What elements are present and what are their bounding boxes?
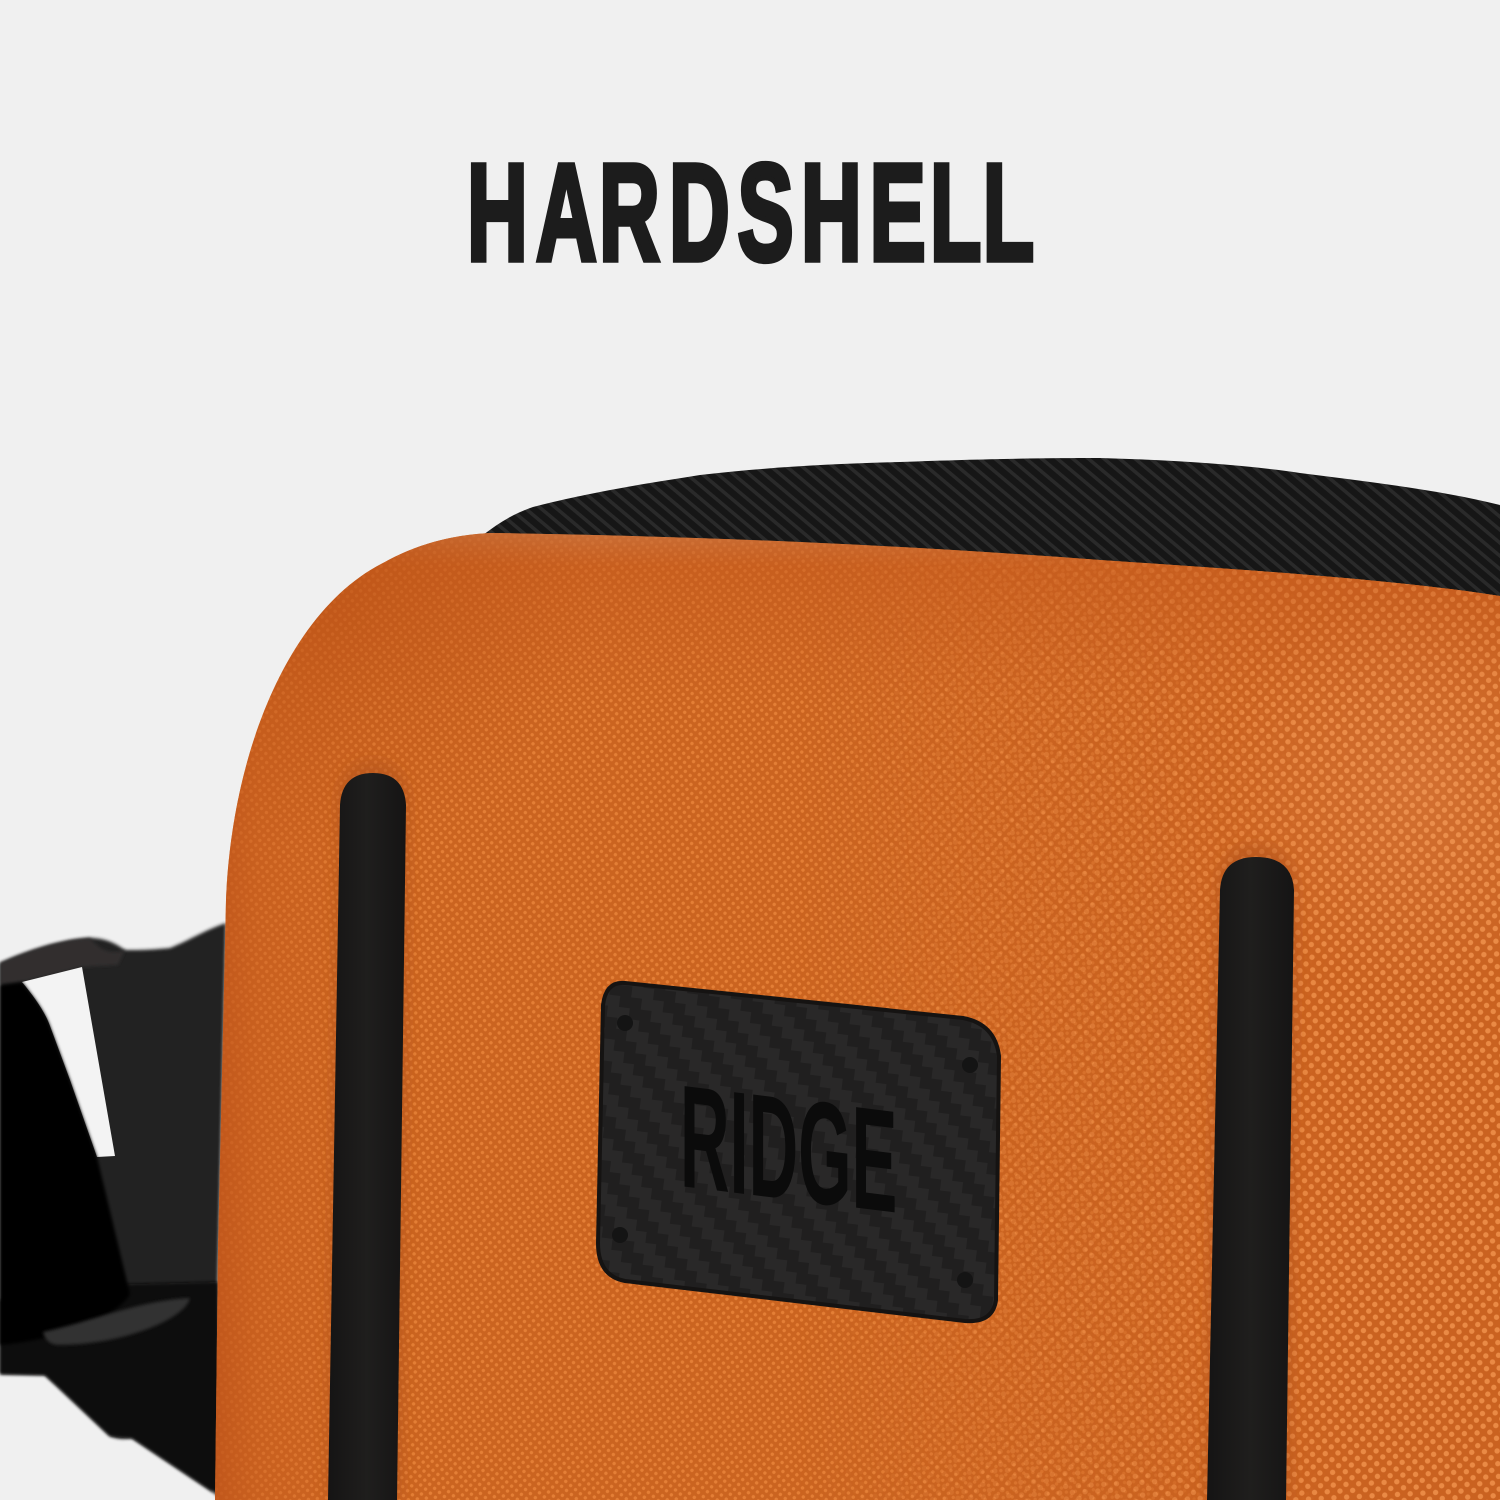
orange hardshell body bbox=[215, 533, 1500, 1500]
carbon fibre RIDGE badge bbox=[598, 983, 999, 1321]
black webbing strap bbox=[0, 982, 130, 1345]
badge logo text: RIDGE bbox=[680, 1056, 897, 1245]
white cutout in buckle bbox=[22, 967, 115, 1157]
badge screw top right bbox=[962, 1057, 978, 1073]
right black rail bbox=[1204, 844, 1298, 1500]
left strap and buckle bbox=[0, 923, 226, 1500]
title: HARDSHELL bbox=[467, 137, 1034, 290]
metal ring bbox=[43, 1298, 190, 1345]
badge screw bottom right bbox=[957, 1272, 973, 1288]
badge screw top left bbox=[617, 1015, 633, 1031]
left black rail bbox=[326, 760, 410, 1500]
badge screw bottom left bbox=[612, 1227, 628, 1243]
black zipper band bbox=[483, 458, 1500, 600]
